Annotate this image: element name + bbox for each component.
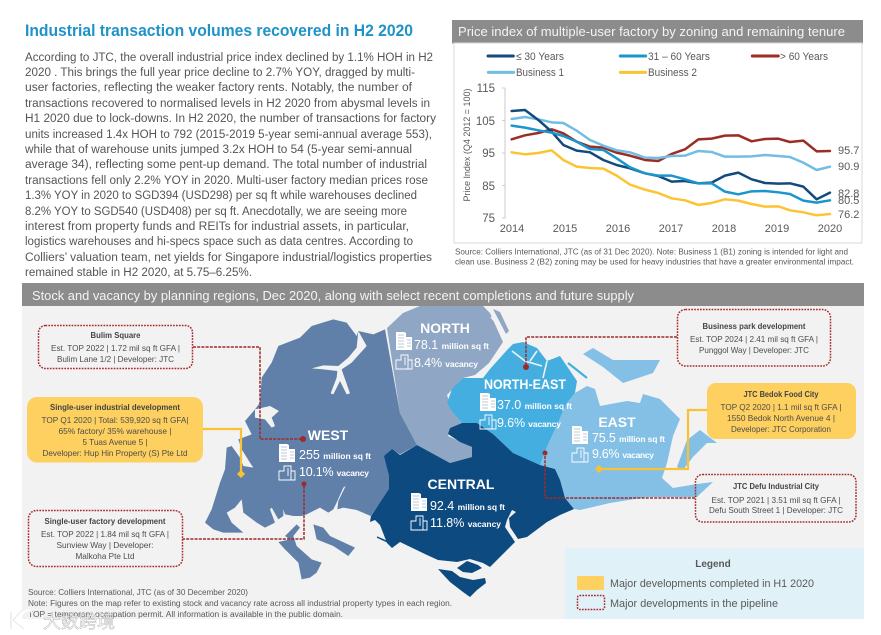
text block: market commentary: 1.3% YOY in 2020 to SGD394 (USD298) per sq ft while warehouses declined — [25, 190, 417, 202]
data labels: 90.9 — [838, 161, 859, 173]
callout: Business park development: Est. TOP 2024 | 2.41 mil sq ft GFA | — [690, 334, 818, 344]
legend: Legend — [695, 559, 731, 570]
legend: Major developments in the pipeline — [610, 598, 778, 610]
callout: Bulim Square: Bulim Lane 1/2 | Developer: JTC — [57, 354, 174, 364]
x axis: 2015 — [553, 223, 577, 235]
connector dots: pipeline — [300, 364, 548, 486]
text block: market commentary: logistics warehouses and hi-specs space such as data centres. According to — [25, 236, 413, 248]
chart legend: > 60 Years — [780, 51, 828, 63]
callout: Single-user industrial development: Developer: Hup Hin Property (S) Pte Ltd — [42, 448, 188, 458]
panel: price index chart — [452, 20, 863, 266]
y axis: 85 — [482, 181, 495, 193]
x axis: 2014 — [500, 223, 524, 235]
text block: market commentary: Colliers’ valuation team, net yields for Singapore industrial/logistics properties — [25, 252, 432, 264]
callout: Bulim Square: Est. TOP 2022 | 1.72 mil sq ft GFA | — [51, 343, 180, 353]
map source note — [28, 588, 452, 619]
connector dots: completed — [237, 465, 603, 478]
callout: Single-user industrial development: Single-user industrial development — [50, 402, 180, 412]
callout: Single-user industrial development: TOP Q1 2020 | Total: 539,920 sq ft GFA| — [42, 415, 188, 425]
y axis: Price Index (Q4 2012 = 100) — [462, 88, 473, 202]
region label: east — [572, 414, 665, 462]
text block: market commentary: transactions fell only 2.2% YOY in 2020. Multi-user factory median prices rose — [25, 175, 428, 187]
text block: market commentary: units increased 1.4x HOH to 792 (2015-2019 5-year semi-annual average 553), — [25, 129, 432, 141]
region label: east: 9.6% vacancy — [592, 447, 654, 461]
x axis — [500, 223, 842, 235]
watermark: 大数跨境 — [43, 612, 115, 632]
callout: Single-user factory development: Sunview Way | Developer: — [56, 540, 154, 550]
text block: market commentary: interest from property funds and REITs for industrial assets, in particular, — [25, 221, 409, 233]
region label: central — [411, 476, 505, 530]
region label: west: WEST — [308, 427, 349, 443]
callout: JTC Defu Industrial City: Est. TOP 2021 | 3.51 mil sq ft GFA | — [712, 495, 840, 505]
callout: Single-user factory development — [28, 510, 182, 566]
connectors: pipeline leaders — [182, 337, 695, 539]
region: north-east — [447, 342, 587, 465]
callout: Business park development — [678, 310, 830, 366]
watermark — [11, 610, 115, 632]
chart heading: Price index of multiple-user factory by zoning and remaining tenure — [458, 25, 845, 39]
region: east — [540, 348, 717, 510]
callout: JTC Defu Industrial City: JTC Defu Industrial City — [733, 481, 819, 491]
region label: central: 92.4 million sq ft — [430, 499, 505, 513]
data labels: 95.7 — [838, 145, 859, 157]
chart legend: Business 2 — [648, 67, 697, 79]
chart source note: Source: Colliers International, JTC (as of 31 Dec 2020). Note: Business 1 (B1) zoning is intended for light and — [455, 248, 848, 256]
map source note: Source: Colliers International, JTC (as of 30 December 2020) — [28, 588, 248, 597]
line chart series — [512, 110, 830, 215]
x axis: 2020 — [818, 223, 842, 235]
map of Singapore — [205, 306, 717, 597]
region label: north: 8.4% vacancy — [414, 356, 478, 370]
legend: Major developments completed in H1 2020 — [610, 578, 814, 590]
text block: market commentary: while that of warehouse units jumped 3.2x HOH to 54 (5-year semi-annual — [24, 144, 412, 156]
region label: central: CENTRAL — [428, 476, 495, 492]
text block: market commentary: user factories, reflecting the weaker factory rents. Notably, the number of — [25, 82, 413, 94]
text block: market commentary: transactions recovered to normalised levels in H2 2020 from abysmal levels in — [25, 98, 430, 110]
map source note: TOP = temporary occupation permit. All information is available in the public domain. — [28, 610, 343, 619]
callout: Single-user factory development: Single-user factory development — [44, 516, 166, 526]
x axis: 2017 — [659, 223, 683, 235]
chart source note — [455, 248, 854, 266]
text block: market commentary: According to JTC, the overall industrial price index declined by 1.1% HOH in H2 — [25, 52, 433, 64]
region label: central: 11.8% vacancy — [430, 516, 501, 530]
chart heading — [452, 20, 863, 44]
callout: Business park development: Punggol Way | Developer: JTC — [699, 345, 809, 355]
y axis: 115 — [477, 83, 495, 95]
region label: west: 255 million sq ft — [299, 448, 371, 462]
callout: Bulim Square — [38, 326, 192, 368]
chart legend — [488, 51, 828, 79]
callout: Single-user industrial development — [27, 397, 203, 462]
callout: JTC Defu Industrial City: Defu South Street 1 | Developer: JTC — [709, 505, 843, 515]
chart source note: clean use. Business 2 (B2) zoning may be used for heavy industries that have a greater environmental impact. — [455, 258, 854, 266]
callout: JTC Bedok Food City — [707, 383, 856, 439]
region: west — [205, 319, 417, 579]
y axis: 105 — [476, 116, 495, 128]
region label: east: EAST — [598, 414, 636, 430]
region label: north: 78.1 million sq ft — [414, 338, 489, 352]
y axis — [462, 83, 505, 225]
callout: Single-user industrial development: 65% factory/ 35% warehouse | — [58, 426, 172, 436]
region label: north-east: NORTH-EAST — [484, 376, 566, 392]
x axis: 2018 — [712, 223, 736, 235]
text block: market commentary: 8.2% YOY to SGD540 (USD408) per sq ft. Anecdotally, we are seeing more — [25, 206, 407, 218]
x axis: 2019 — [765, 223, 789, 235]
legend swatch: pipeline — [578, 596, 604, 610]
data labels: 76.2 — [838, 209, 859, 221]
region: north — [387, 306, 509, 463]
data labels: 80.5 — [838, 195, 859, 207]
region label: north: NORTH — [420, 320, 470, 336]
map heading — [22, 283, 864, 306]
map source note: Note: Figures on the map refer to existing stock and vacancy rate across all industrial property types in each region. — [28, 599, 452, 608]
chart legend: 31 – 60 Years — [648, 51, 710, 63]
callout: Single-user factory development: Malkoha Pte Ltd — [76, 551, 135, 561]
chart legend: ≤ 30 Years — [516, 51, 564, 63]
region label: north-east: 9.6% vacancy — [497, 416, 561, 430]
callout: Single-user industrial development: 5 Tuas Avenue 5 | — [82, 437, 148, 447]
text block: market commentary: remained stable in H2 2020, at 5.75–6.25%. — [25, 267, 252, 279]
callout: JTC Bedok Food City: Developer: JTC Corporation — [731, 424, 831, 434]
callout: Single-user factory development: Est. TOP 2022 | 1.84 mil sq ft GFA | — [41, 529, 169, 539]
legend — [565, 548, 864, 619]
panel: stock and vacancy map — [22, 283, 864, 619]
data labels — [838, 145, 859, 221]
map heading: Stock and vacancy by planning regions, Dec 2020, along with select recent completions and future supply — [32, 289, 635, 303]
text block: market commentary — [24, 52, 436, 279]
region: central — [370, 423, 574, 597]
region label: east: 75.5 million sq ft — [592, 431, 665, 445]
callout: JTC Defu Industrial City — [696, 474, 856, 522]
region label: north — [396, 320, 489, 370]
region label: north-east — [480, 376, 572, 430]
region label: north-east: 37.0 million sq ft — [497, 398, 572, 412]
legend swatch: completed — [577, 576, 604, 590]
chart legend: Business 1 — [516, 67, 564, 79]
region label: west: 10.1% vacancy — [299, 465, 369, 479]
x axis: 2016 — [606, 223, 630, 235]
callout: JTC Bedok Food City: JTC Bedok Food City — [744, 389, 819, 399]
y axis: 95 — [482, 148, 495, 160]
title: Industrial transaction volumes recovered in H2 2020 — [25, 22, 413, 40]
text block: market commentary: H1 2020 due to lock-downs. In H2 2020, the number of transactions for factory — [25, 113, 436, 125]
connectors: completed leaders — [203, 410, 707, 474]
callout: Business park development: Business park development — [702, 321, 806, 331]
text block: market commentary: 2020 . This brings the full year price decline to 2.7% YOY, dragged by multi- — [25, 67, 415, 79]
callout: JTC Bedok Food City: TOP Q2 2020 | 1.1 mil sq ft GFA | — [720, 402, 842, 412]
y axis: 75 — [482, 213, 495, 225]
callout: JTC Bedok Food City: 1550 Bedok North Avenue 4 | — [727, 413, 835, 423]
text block: market commentary: average 34), reflecting some pent-up demand. The total number of industrial — [25, 159, 427, 171]
callout: Bulim Square: Bulim Square — [90, 330, 141, 340]
data labels: 82.8 — [838, 188, 859, 200]
region label: west — [279, 427, 371, 480]
